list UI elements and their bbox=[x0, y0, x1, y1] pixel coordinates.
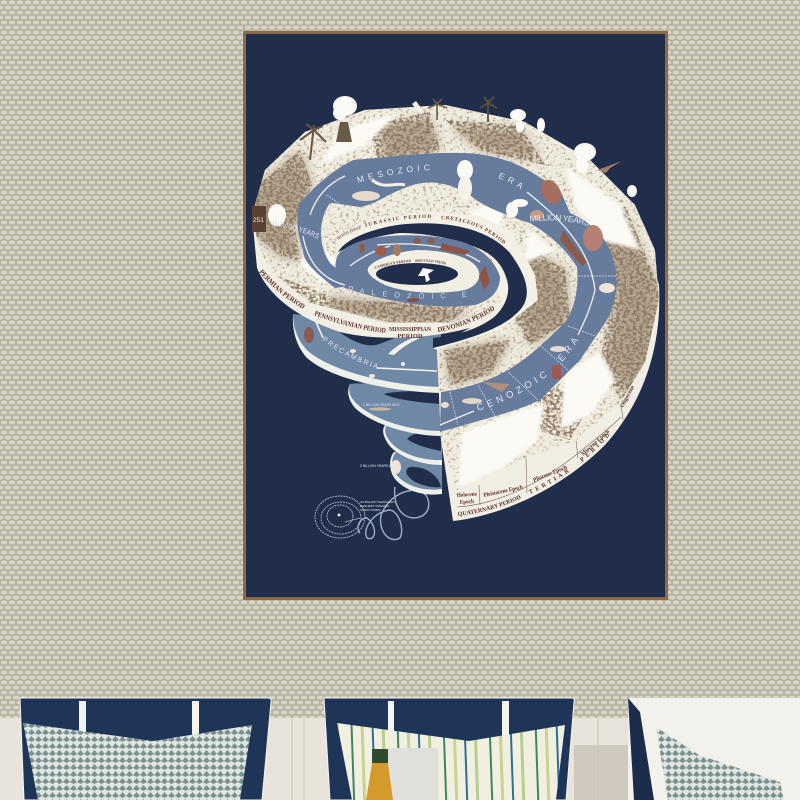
label: 3 billion years ago: 3 BILLION YEARS AGO bbox=[360, 464, 397, 468]
period labels on the walls: ORDOVICIAN PERIOD bbox=[415, 259, 446, 264]
land surface bbox=[245, 95, 665, 495]
period labels on the walls: PERIOD bbox=[397, 333, 423, 340]
label: earliest organic structures: 4.6 BILLION YEARS AGO bbox=[360, 500, 395, 504]
centre cushion with stripes bbox=[324, 698, 574, 800]
navy gap between coils bbox=[338, 223, 527, 348]
epoch labels on the front wedge: Oligocene bbox=[619, 385, 636, 409]
inner land island bbox=[368, 250, 479, 293]
label: 1 billion years ago: 1 BILLION YEARS AGO bbox=[363, 403, 400, 407]
era labels on the seas: MILLION YEARS bbox=[530, 214, 590, 226]
period labels on the walls: DEVONIAN PERIOD bbox=[437, 306, 494, 332]
era labels on the seas: MILLION YEARS bbox=[272, 221, 320, 238]
epoch labels on the front wedge bbox=[457, 385, 636, 507]
innermost hole with white pterosaur bbox=[376, 263, 458, 285]
surface volcanoes, clouds and palms bbox=[268, 96, 637, 226]
inner sea: Paleozoic ring bbox=[335, 235, 500, 306]
period labels on the walls: TRIASSIC PERIOD bbox=[336, 226, 360, 240]
fossils on the seas bbox=[352, 176, 615, 408]
period labels on the walls: TERTIARY bbox=[528, 469, 570, 494]
label: earliest organic structures: EARLIEST ORGANIC bbox=[360, 504, 390, 508]
Precambrian lower spiral coils bbox=[293, 314, 442, 540]
white snow and sea-foam highlights bbox=[300, 112, 640, 488]
period labels on the walls bbox=[259, 214, 609, 516]
period labels on the walls: QUATERNARY PERIOD bbox=[458, 496, 520, 516]
era labels on the seas: ERA bbox=[557, 338, 578, 362]
origin of solar system rings bbox=[315, 496, 365, 538]
era labels on the seas: CENOZOIC bbox=[477, 372, 546, 410]
darker terrain tones bbox=[252, 118, 660, 395]
left cushion bbox=[20, 698, 271, 800]
period labels on the walls: MISSISSIPPIAN bbox=[389, 326, 431, 333]
spiral wall base bbox=[252, 105, 659, 521]
period labels on the walls: PENNSYLVANIAN PERIOD bbox=[314, 310, 386, 333]
sofa bbox=[0, 718, 800, 800]
label: earliest organic structures: STRUCTURES bbox=[360, 508, 381, 512]
brown date tag: 251 bbox=[252, 206, 266, 232]
epoch labels on the front wedge: Miocene Epoch bbox=[580, 429, 612, 457]
brown date tag: 251: 251 bbox=[253, 217, 264, 224]
epoch labels on the front wedge: Pliocene Epoch bbox=[533, 465, 569, 484]
white time lines on the seas bbox=[303, 176, 595, 425]
period labels on the walls: PERMIAN PERIOD bbox=[259, 269, 304, 308]
Jurassic and Cretaceous wall band bbox=[338, 211, 538, 318]
epoch labels on the front wedge: Holocene bbox=[457, 492, 477, 499]
dashed era ticks bbox=[327, 195, 616, 425]
right cushion bbox=[628, 698, 800, 800]
champagne bottle and glass bbox=[366, 748, 438, 800]
period labels on the walls: CRETACEOUS PERIOD bbox=[441, 216, 506, 244]
era labels on the seas: MESOZOIC bbox=[357, 164, 430, 183]
Cambrian and Ordovician wall band bbox=[368, 257, 462, 274]
era labels on the seas: ERA bbox=[498, 172, 522, 190]
period labels on the walls: CAMBRIAN PERIOD bbox=[374, 260, 411, 269]
era labels on the seas bbox=[272, 164, 590, 410]
period labels on the walls: PERIOD bbox=[580, 434, 609, 462]
epoch labels on the front wedge: Pleistocene Epoch bbox=[483, 485, 524, 499]
era labels on the seas: PRECAMBRIAN bbox=[322, 336, 378, 369]
period labels on the walls: JURASSIC PERIOD bbox=[365, 214, 431, 227]
outer sea: Mesozoic and Cenozoic river bbox=[297, 153, 617, 432]
poster frame bbox=[243, 31, 668, 600]
epoch labels on the front wedge: Epoch bbox=[460, 499, 475, 506]
